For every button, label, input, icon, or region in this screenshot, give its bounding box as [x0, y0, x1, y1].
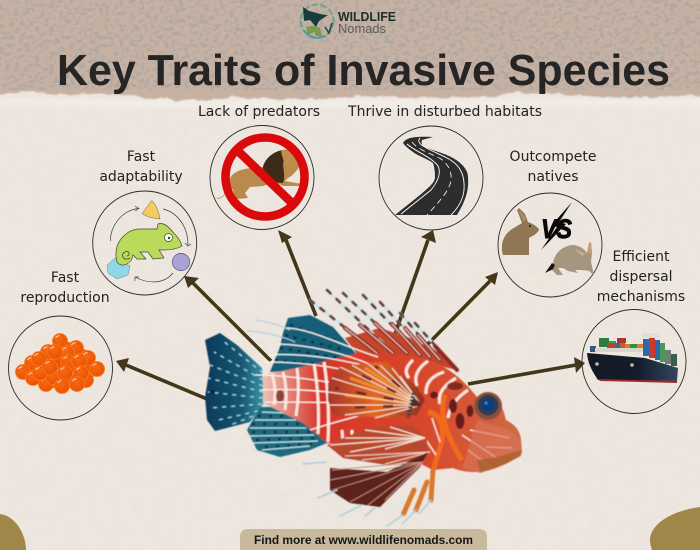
- icon: lion with prohibition sign: [210, 126, 314, 230]
- logo subtitle: Nomads: [338, 22, 386, 36]
- decorative corner: bottom left: [0, 514, 26, 550]
- decorative corner: bottom right: [650, 507, 700, 550]
- icon: rabbit versus bilby: [498, 193, 602, 297]
- icon: container ship: [582, 310, 686, 414]
- long white filaments: [247, 320, 395, 430]
- upper pectoral fin: [328, 362, 425, 418]
- icon: chameleon adaptability cycle: [93, 191, 197, 295]
- maroon ventral fin: [330, 452, 428, 507]
- torn header band: [0, 0, 700, 108]
- dorsal spines: [310, 290, 457, 370]
- title: Key Traits of Invasive Species: [57, 46, 670, 95]
- body: [263, 353, 522, 473]
- soft dorsal blue fin: [270, 315, 357, 372]
- icon: fish eggs: [8, 316, 112, 420]
- label: fast reproduction: Fast: [51, 270, 80, 286]
- arrow: to fast reproduction: [116, 358, 207, 399]
- label: fast reproduction: reproduction: [20, 290, 110, 306]
- icon: winding road: [379, 126, 483, 230]
- lower pectoral fin: [327, 425, 430, 465]
- label: efficient dispersal mechanisms: Efficient: [613, 249, 670, 265]
- footer bar: [240, 529, 487, 550]
- tail fin: [205, 333, 264, 431]
- label: efficient dispersal mechanisms: dispersal: [609, 269, 673, 285]
- label: outcompete natives: natives: [527, 169, 579, 185]
- label: thrive in disturbed habitats: Thrive in disturbed habitats: [347, 104, 542, 120]
- logo emblem: [300, 4, 334, 38]
- logo wordmark: WILDLIFE: [338, 9, 396, 24]
- label: fast adaptability: adaptability: [99, 169, 183, 185]
- ventral spines: [303, 462, 433, 526]
- label: fast adaptability: Fast: [127, 149, 156, 165]
- lionfish: [205, 290, 522, 526]
- arrow: to outcompete natives: [421, 272, 498, 351]
- footer link text: Find more at www.wildlifenomads.com: [254, 533, 473, 547]
- label: outcompete natives: Outcompete: [510, 149, 596, 165]
- arrow: to fast adaptability: [184, 276, 271, 361]
- arrow: to disturbed habitats: [395, 230, 436, 334]
- eye: [474, 392, 502, 420]
- arrow: to dispersal mechanisms: [468, 357, 585, 384]
- versus bolt: VS: [541, 214, 572, 244]
- label: lack of predators: Lack of predators: [198, 104, 320, 120]
- anal blue fin: [247, 407, 327, 457]
- arrow: to lack of predators: [278, 230, 316, 316]
- label: efficient dispersal mechanisms: mechanisms: [597, 289, 685, 305]
- logo: [300, 4, 396, 38]
